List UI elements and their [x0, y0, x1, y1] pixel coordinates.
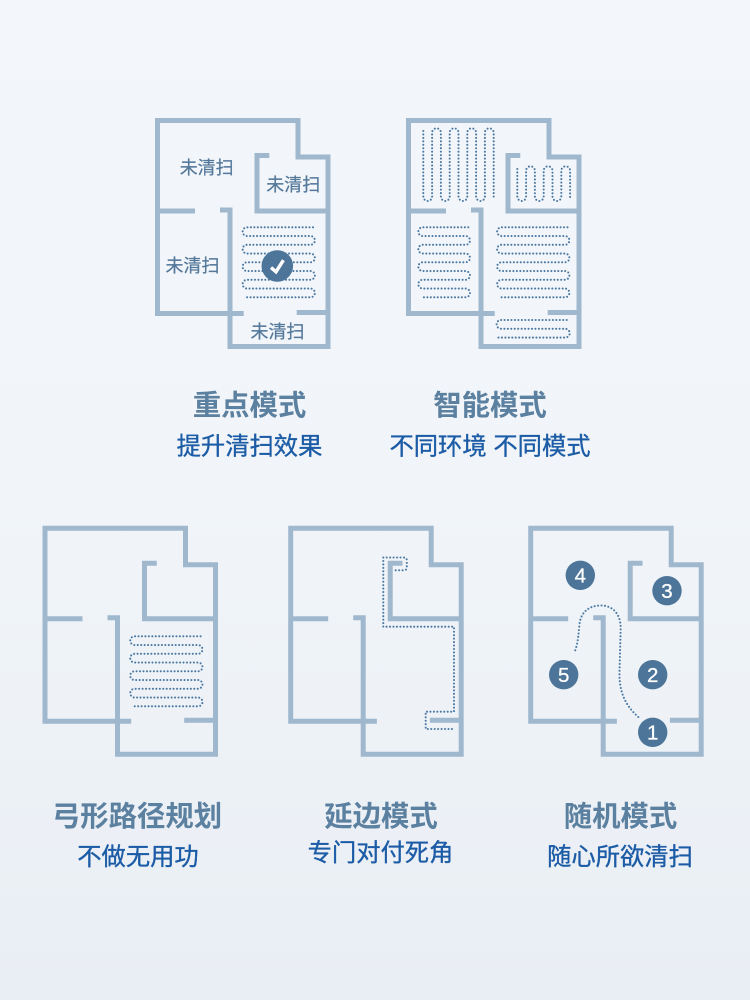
marker: 1: 1	[647, 722, 658, 744]
cleaning path: serpentine	[130, 636, 202, 706]
floor plan: random mode	[531, 528, 701, 754]
marker: 4: 4	[575, 564, 586, 588]
cleaning path: centre room	[497, 227, 569, 297]
subheading: smart mode: 不同环境 不同模式	[389, 434, 591, 461]
panel: edge mode	[291, 528, 461, 867]
marker: 2	[638, 660, 667, 689]
heading: smart mode: 智能模式	[433, 390, 547, 422]
room label: top left: 未清扫	[180, 158, 234, 178]
icon: check badge	[262, 250, 293, 282]
floor plan: serpentine path	[45, 528, 216, 754]
heading: edge mode: 延边模式	[324, 801, 438, 833]
cleaning path: focus room	[243, 227, 315, 297]
subheading: focus mode: 提升清扫效果	[177, 434, 322, 461]
marker: 5	[549, 660, 578, 689]
panel: focus mode	[158, 120, 328, 461]
marker: 5: 5	[558, 664, 569, 687]
subheading: serpentine path: 不做无用功	[77, 844, 199, 871]
cleaning path: top left room	[423, 128, 494, 201]
marker: 4	[566, 561, 595, 590]
room label: left: 未清扫	[166, 256, 220, 276]
cleaning path: top right room	[517, 166, 570, 201]
panel: smart mode	[389, 120, 591, 461]
cleaning path: left room	[418, 227, 470, 297]
heading: random mode: 随机模式	[564, 801, 677, 833]
heading: serpentine path: 弓形路径规划	[52, 801, 222, 833]
panel: random mode	[531, 528, 701, 871]
heading: focus mode: 重点模式	[193, 390, 306, 422]
floor plan: focus mode	[158, 120, 328, 346]
panel: serpentine path	[45, 528, 222, 871]
marker: 1	[638, 718, 667, 747]
cleaning path: along edges	[383, 558, 454, 729]
marker: 3	[652, 576, 682, 605]
floor plan: edge mode	[291, 528, 461, 754]
cleaning path: random	[575, 606, 638, 717]
floor plan: smart mode	[408, 120, 579, 346]
cleaning path: bottom room	[497, 320, 570, 338]
marker: 3: 3	[661, 580, 673, 603]
subheading: edge mode: 专门对付死角	[308, 840, 453, 867]
room label: bottom: 未清扫	[250, 322, 304, 342]
marker: 2: 2	[647, 664, 658, 687]
room label: top right: 未清扫	[266, 175, 320, 195]
subheading: random mode: 随心所欲清扫	[547, 844, 693, 871]
